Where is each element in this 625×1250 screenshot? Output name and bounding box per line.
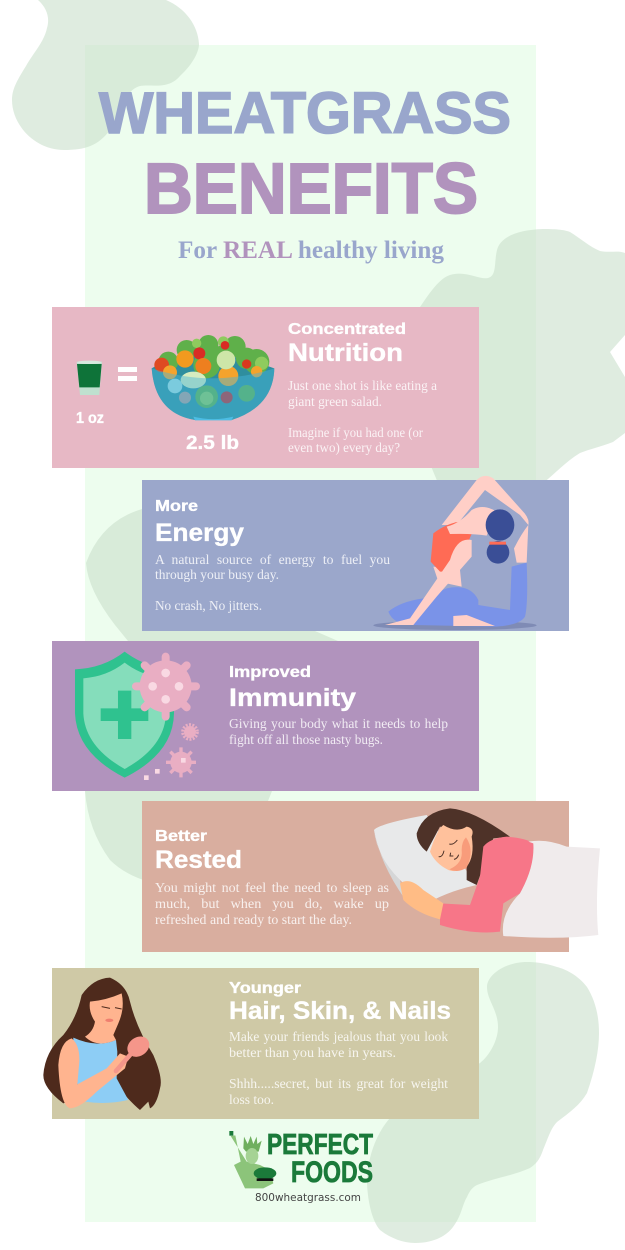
body text: through your busy day. bbox=[155, 567, 279, 582]
background panel bbox=[85, 45, 536, 1222]
body text: Just one shot is like eating a bbox=[288, 378, 437, 393]
heading: younger hair, skin and nails bbox=[229, 980, 451, 1025]
body text bbox=[288, 378, 437, 455]
heading: concentrated nutrition: Concentrated bbox=[288, 321, 406, 338]
body text bbox=[155, 552, 390, 613]
body text: Imagine if you had one (or bbox=[288, 425, 423, 440]
logo wordmark: PERFECT bbox=[267, 1129, 373, 1161]
logo wordmark: FOODS bbox=[291, 1156, 373, 1189]
body text: even two) every day? bbox=[288, 440, 400, 455]
icon: statue with wheatgrass bbox=[229, 1131, 276, 1188]
body text: refreshed and ready to start the day. bbox=[155, 912, 352, 927]
subtitle: For REAL healthy living bbox=[178, 237, 444, 264]
heading: improved immunity bbox=[229, 664, 356, 712]
label: 1 oz: 1 oz bbox=[76, 410, 104, 427]
heading: younger hair, skin and nails: Hair, Skin, & Nails bbox=[229, 997, 451, 1025]
body text: fight off all those nasty bugs. bbox=[229, 732, 383, 747]
panel: younger hair, skin and nails bbox=[43, 968, 479, 1119]
panel: concentrated nutrition bbox=[52, 307, 479, 468]
heading: improved immunity: Improved bbox=[229, 664, 311, 681]
heading: more energy: More bbox=[155, 498, 198, 515]
heading: concentrated nutrition: Nutrition bbox=[288, 339, 403, 367]
icon: salad bowl bbox=[152, 335, 274, 420]
body text: loss too. bbox=[229, 1092, 274, 1107]
body text: much, but when you do, wake up bbox=[155, 896, 389, 911]
heading: improved immunity: Immunity bbox=[229, 684, 356, 712]
body text: Shhh.....secret, but its great for weight bbox=[229, 1076, 448, 1091]
label: 2.5 lb: 2.5 lb bbox=[186, 433, 239, 454]
panel: improved immunity bbox=[52, 641, 479, 791]
body text bbox=[155, 880, 389, 927]
title: WHEATGRASS bbox=[99, 81, 511, 146]
heading: better rested: Rested bbox=[155, 846, 242, 874]
website: 800wheatgrass.com bbox=[255, 1192, 361, 1204]
heading: more energy bbox=[155, 498, 244, 547]
logo wordmark bbox=[267, 1129, 373, 1189]
body text: Giving your body what it needs to help bbox=[229, 716, 448, 731]
panel: better rested bbox=[142, 801, 600, 952]
body text bbox=[229, 1029, 448, 1107]
heading: more energy: Energy bbox=[155, 519, 244, 547]
body text: No crash, No jitters. bbox=[155, 598, 262, 613]
illustration: woman brushing hair bbox=[43, 978, 161, 1110]
equals sign bbox=[118, 367, 137, 381]
panel: more energy bbox=[142, 476, 569, 631]
body text: A natural source of energy to fuel you bbox=[155, 552, 390, 567]
heading: younger hair, skin and nails: Younger bbox=[229, 980, 301, 997]
body text: You might not feel the need to sleep as bbox=[155, 880, 389, 895]
body text bbox=[229, 716, 448, 747]
heading: concentrated nutrition bbox=[288, 321, 406, 367]
icon: wheatgrass shot bbox=[77, 361, 102, 395]
title: BENEFITS bbox=[144, 150, 478, 229]
body text: giant green salad. bbox=[288, 394, 382, 409]
illustration: sleeping woman bbox=[374, 808, 600, 938]
logo: perfect foods bbox=[229, 1129, 373, 1204]
body text: better than you have in years. bbox=[229, 1045, 396, 1060]
illustration: yoga pose bbox=[373, 476, 537, 630]
title bbox=[99, 81, 511, 229]
icon: shield and virus bbox=[75, 652, 197, 780]
heading: better rested bbox=[155, 828, 242, 874]
body text: Make your friends jealous that you look bbox=[229, 1029, 448, 1044]
heading: better rested: Better bbox=[155, 828, 207, 845]
